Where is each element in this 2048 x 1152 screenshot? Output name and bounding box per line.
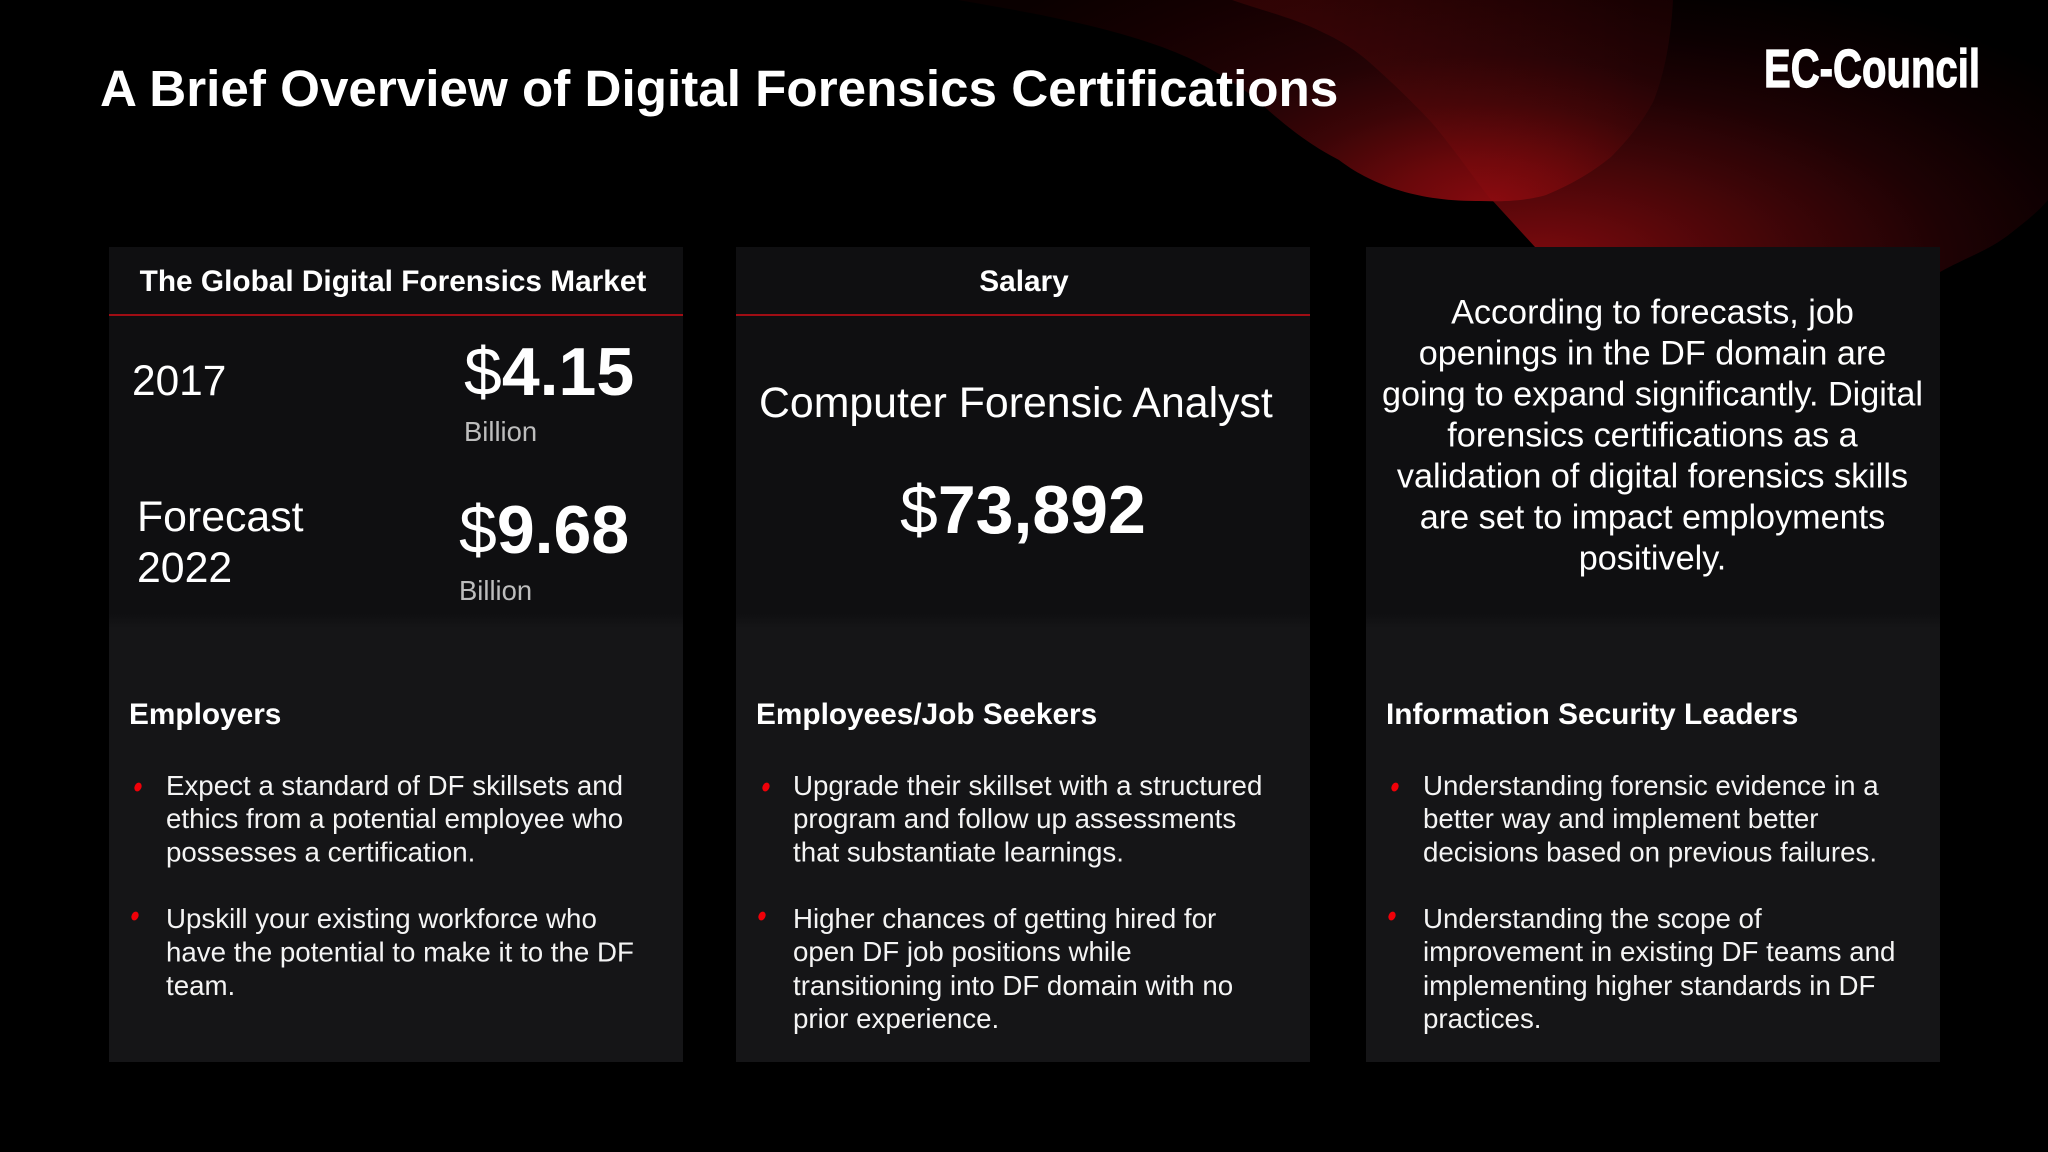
year 2017: 2017 — [132, 357, 226, 404]
heading: leaders: Information Security Leaders — [1386, 698, 1798, 731]
forecast 2022: Forecast — [137, 493, 304, 541]
job title: Computer Forensic Analyst — [759, 379, 1273, 427]
heading: employers: Employers — [129, 698, 281, 731]
value 4.15 billion: $4.15 — [464, 334, 634, 410]
bullet list: leaders: improvement in existing DF teams and — [1423, 936, 1895, 967]
background: red wave front — [958, 0, 1673, 201]
background: red wave rear — [1400, 0, 2048, 330]
paragraph: forecasts: are set to impact employments — [1420, 498, 1885, 536]
value 9.68 billion: $9.68 — [459, 492, 629, 568]
bullet list: employees: Upgrade their skillset with a structured — [793, 770, 1262, 801]
paragraph: forecasts: openings in the DF domain are — [1419, 334, 1886, 372]
bullet list: employers: team. — [166, 970, 235, 1001]
heading: salary: Salary — [979, 265, 1069, 298]
paragraph: forecasts: forensics certifications as a — [1447, 416, 1859, 454]
bullet list: leaders: decisions based on previous failures. — [1423, 836, 1877, 868]
bullet list: leaders: better way and implement better — [1423, 803, 1819, 834]
bullet list: employees: transitioning into DF domain with no — [793, 970, 1233, 1001]
panel: global market — [109, 247, 683, 1062]
forecast 2022 — [137, 493, 304, 592]
bullet list: leaders: implementing higher standards in DF — [1423, 970, 1875, 1001]
value 4.15 billion: Billion — [464, 416, 537, 447]
bullet list: employees — [757, 770, 1262, 1034]
bullet list: employees: prior experience. — [793, 1003, 999, 1034]
bullet list: employers — [130, 770, 634, 1001]
bullet list: employees: that substantiate learnings. — [793, 836, 1124, 868]
title: A Brief Overview of Digital Forensics Certifications — [100, 60, 1338, 117]
salary value: $73,892 — [900, 472, 1146, 548]
bullet list: leaders: Understanding the scope of — [1423, 903, 1762, 934]
bullet list: employees: Higher chances of getting hired for — [793, 903, 1216, 934]
bullet list: employers: possesses a certification. — [166, 836, 475, 868]
paragraph: forecasts: validation of digital forensics skills — [1397, 458, 1908, 496]
value 9.68 billion — [459, 492, 629, 606]
heading: market: The Global Digital Forensics Market — [140, 265, 646, 298]
paragraph: forecasts — [1382, 294, 1923, 578]
bullet list: leaders: Understanding forensic evidence in a — [1423, 770, 1879, 801]
bullet list: employers: have the potential to make it to the DF — [166, 936, 634, 968]
forecast 2022: 2022 — [137, 544, 232, 592]
bullet list: employees: program and follow up assessments — [793, 803, 1236, 834]
bullet list: leaders: practices. — [1423, 1003, 1541, 1034]
value 9.68 billion: Billion — [459, 575, 532, 606]
paragraph: forecasts: going to expand significantly. Digital — [1382, 376, 1923, 414]
paragraph: forecasts: positively. — [1579, 540, 1726, 578]
panel: forecast and leaders — [1366, 247, 1940, 1062]
bullet list: leaders — [1387, 770, 1895, 1034]
panel: salary — [736, 247, 1310, 1062]
value 4.15 billion — [464, 334, 634, 447]
logo: EC-Council: EC-Council — [1764, 39, 1980, 99]
bullet list: employers: Expect a standard of DF skillsets and — [166, 770, 623, 801]
background: wave fold highlight — [1232, 0, 1673, 201]
paragraph: forecasts: According to forecasts, job — [1451, 294, 1854, 332]
bullet list: employers: ethics from a potential employee who — [166, 803, 623, 834]
heading: employees: Employees/Job Seekers — [756, 698, 1097, 731]
bullet list: employers: Upskill your existing workforce who — [166, 903, 597, 934]
bullet list: employees: open DF job positions while — [793, 936, 1132, 967]
